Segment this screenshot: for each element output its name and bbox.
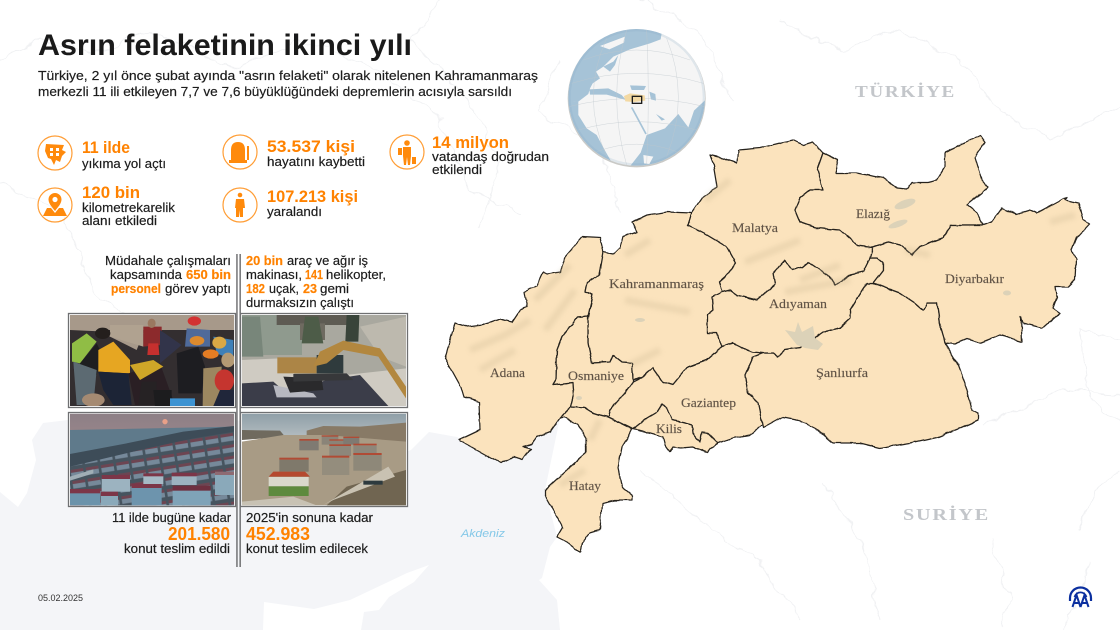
text: vehicles note: gemi [320, 282, 349, 296]
center divider [236, 254, 241, 567]
stat: 120 bin: kilometrekarelik [82, 201, 176, 215]
text: personnel note: kapsamında [110, 268, 182, 282]
stat: 107.213 kişi: 107.213 kişi [267, 188, 358, 206]
subtitle: Türkiye, 2 yıl önce şubat ayında "asrın felaketi" olarak nitelenen Kahramanmaraş [38, 68, 539, 83]
stat: 11 ilde: 11 ilde [82, 139, 130, 157]
province: Malatya [688, 140, 873, 300]
text: vehicles note: 23 [303, 282, 317, 296]
province: Şanlıurfa [745, 283, 978, 448]
text: vehicles note: 182 [246, 282, 265, 296]
text: vehicles note: 141 [305, 268, 323, 282]
photo: housing under construction [242, 414, 406, 505]
caption: planned housing: konut teslim edilecek [246, 542, 369, 556]
text: personnel note: personel [111, 282, 161, 296]
stat: 53.537 kişi: hayatını kaybetti [267, 155, 365, 169]
map: province labels: Osmaniye [568, 368, 624, 383]
map: province labels: Malatya [732, 220, 778, 235]
stat: 120 bin: 120 bin [82, 184, 140, 202]
stat: 11 ilde [38, 136, 166, 171]
stat: 120 bin: alanı etkiledi [82, 214, 157, 228]
map: province labels: Elazığ [856, 206, 890, 221]
date: 05.02.2025 [38, 593, 83, 604]
stat: 107.213 kişi [223, 188, 358, 222]
caption: planned housing [246, 511, 373, 556]
province: Gaziantep [608, 343, 767, 443]
logo: AA [1070, 588, 1091, 607]
map: province labels: Kilis [656, 421, 682, 436]
photo: excavator on rubble [242, 315, 406, 406]
photo: new housing city [70, 414, 234, 505]
label: SURİYE: SURİYE [903, 505, 990, 524]
stat: 14 milyon: vatandaş doğrudan [432, 150, 549, 164]
text: personnel note: görev yaptı [165, 282, 231, 296]
map: province labels: Hatay [569, 478, 602, 493]
caption: planned housing: 452.983 [246, 524, 310, 544]
province: Kahramanmaraş [585, 212, 736, 385]
caption: delivered housing: 11 ilde bugüne kadar [112, 511, 231, 525]
map: province labels: Şanlıurfa [816, 365, 868, 380]
map: terrain and lakes [470, 180, 1075, 485]
text: vehicles note: araç ve ağır iş [287, 254, 368, 268]
subtitle [38, 68, 539, 99]
province: Kilis [633, 404, 718, 452]
photo: rescue workers [70, 315, 235, 407]
title: Asrın felaketinin ikinci yılı [38, 29, 412, 62]
text: vehicles note [246, 254, 386, 310]
map: provinces [445, 135, 1089, 552]
province: Elazığ [795, 135, 988, 255]
locator globe [568, 29, 706, 168]
stat: 14 milyon [390, 134, 549, 177]
subtitle: merkezli 11 ili etkileyen 7,7 ve 7,6 büyüklüğündeki depremlerin acısıyla sarsıldı [38, 84, 512, 99]
label: Akdeniz: Akdeniz [460, 528, 506, 540]
icon: map pin [38, 188, 72, 222]
map: province labels: Adıyaman [769, 296, 828, 311]
stat: 107.213 kişi: yaralandı [267, 205, 322, 219]
text: personnel note: Müdahale çalışmaları [105, 254, 231, 268]
text: personnel note: 650 bin [186, 268, 231, 282]
icon: person with luggage [390, 135, 424, 169]
caption: delivered housing: konut teslim edildi [124, 542, 230, 556]
province: Osmaniye [553, 316, 633, 417]
text: vehicles note: uçak, [269, 282, 299, 296]
province: Diyarbakır [870, 197, 1089, 344]
icon: gravestone [223, 135, 257, 169]
province: Adıyaman [707, 258, 883, 357]
photo grid [68, 314, 408, 506]
province: Adana [445, 236, 603, 463]
text: vehicles note: makinası, [246, 268, 302, 282]
caption: delivered housing [112, 511, 231, 556]
map: province labels: Diyarbakır [945, 271, 1005, 286]
map: province labels: Adana [490, 365, 525, 380]
map: province labels: Gaziantep [681, 395, 736, 410]
stat: 11 ilde: yıkıma yol açtı [82, 157, 166, 171]
icon: collapsed building [38, 136, 72, 170]
stat: 53.537 kişi [223, 135, 365, 169]
stat: 120 bin [38, 184, 176, 228]
caption: planned housing: 2025'in sonuna kadar [246, 511, 373, 525]
province: Hatay [545, 407, 632, 552]
map: province labels: Kahramanmaraş [609, 276, 704, 291]
stat: 14 milyon: 14 milyon [432, 134, 509, 152]
icon: injured person [223, 188, 257, 222]
stat: 14 milyon: etkilendi [432, 163, 482, 177]
label: TÜRKİYE: TÜRKİYE [855, 82, 956, 101]
text: vehicles note: helikopter, [326, 268, 386, 282]
text: vehicles note: durmaksızın çalıştı [246, 296, 354, 310]
text: vehicles note: 20 bin [246, 254, 283, 268]
text: personnel note [105, 254, 231, 296]
map: province labels [490, 206, 1005, 493]
stat: 53.537 kişi: 53.537 kişi [267, 138, 355, 156]
caption: delivered housing: 201.580 [168, 524, 230, 544]
